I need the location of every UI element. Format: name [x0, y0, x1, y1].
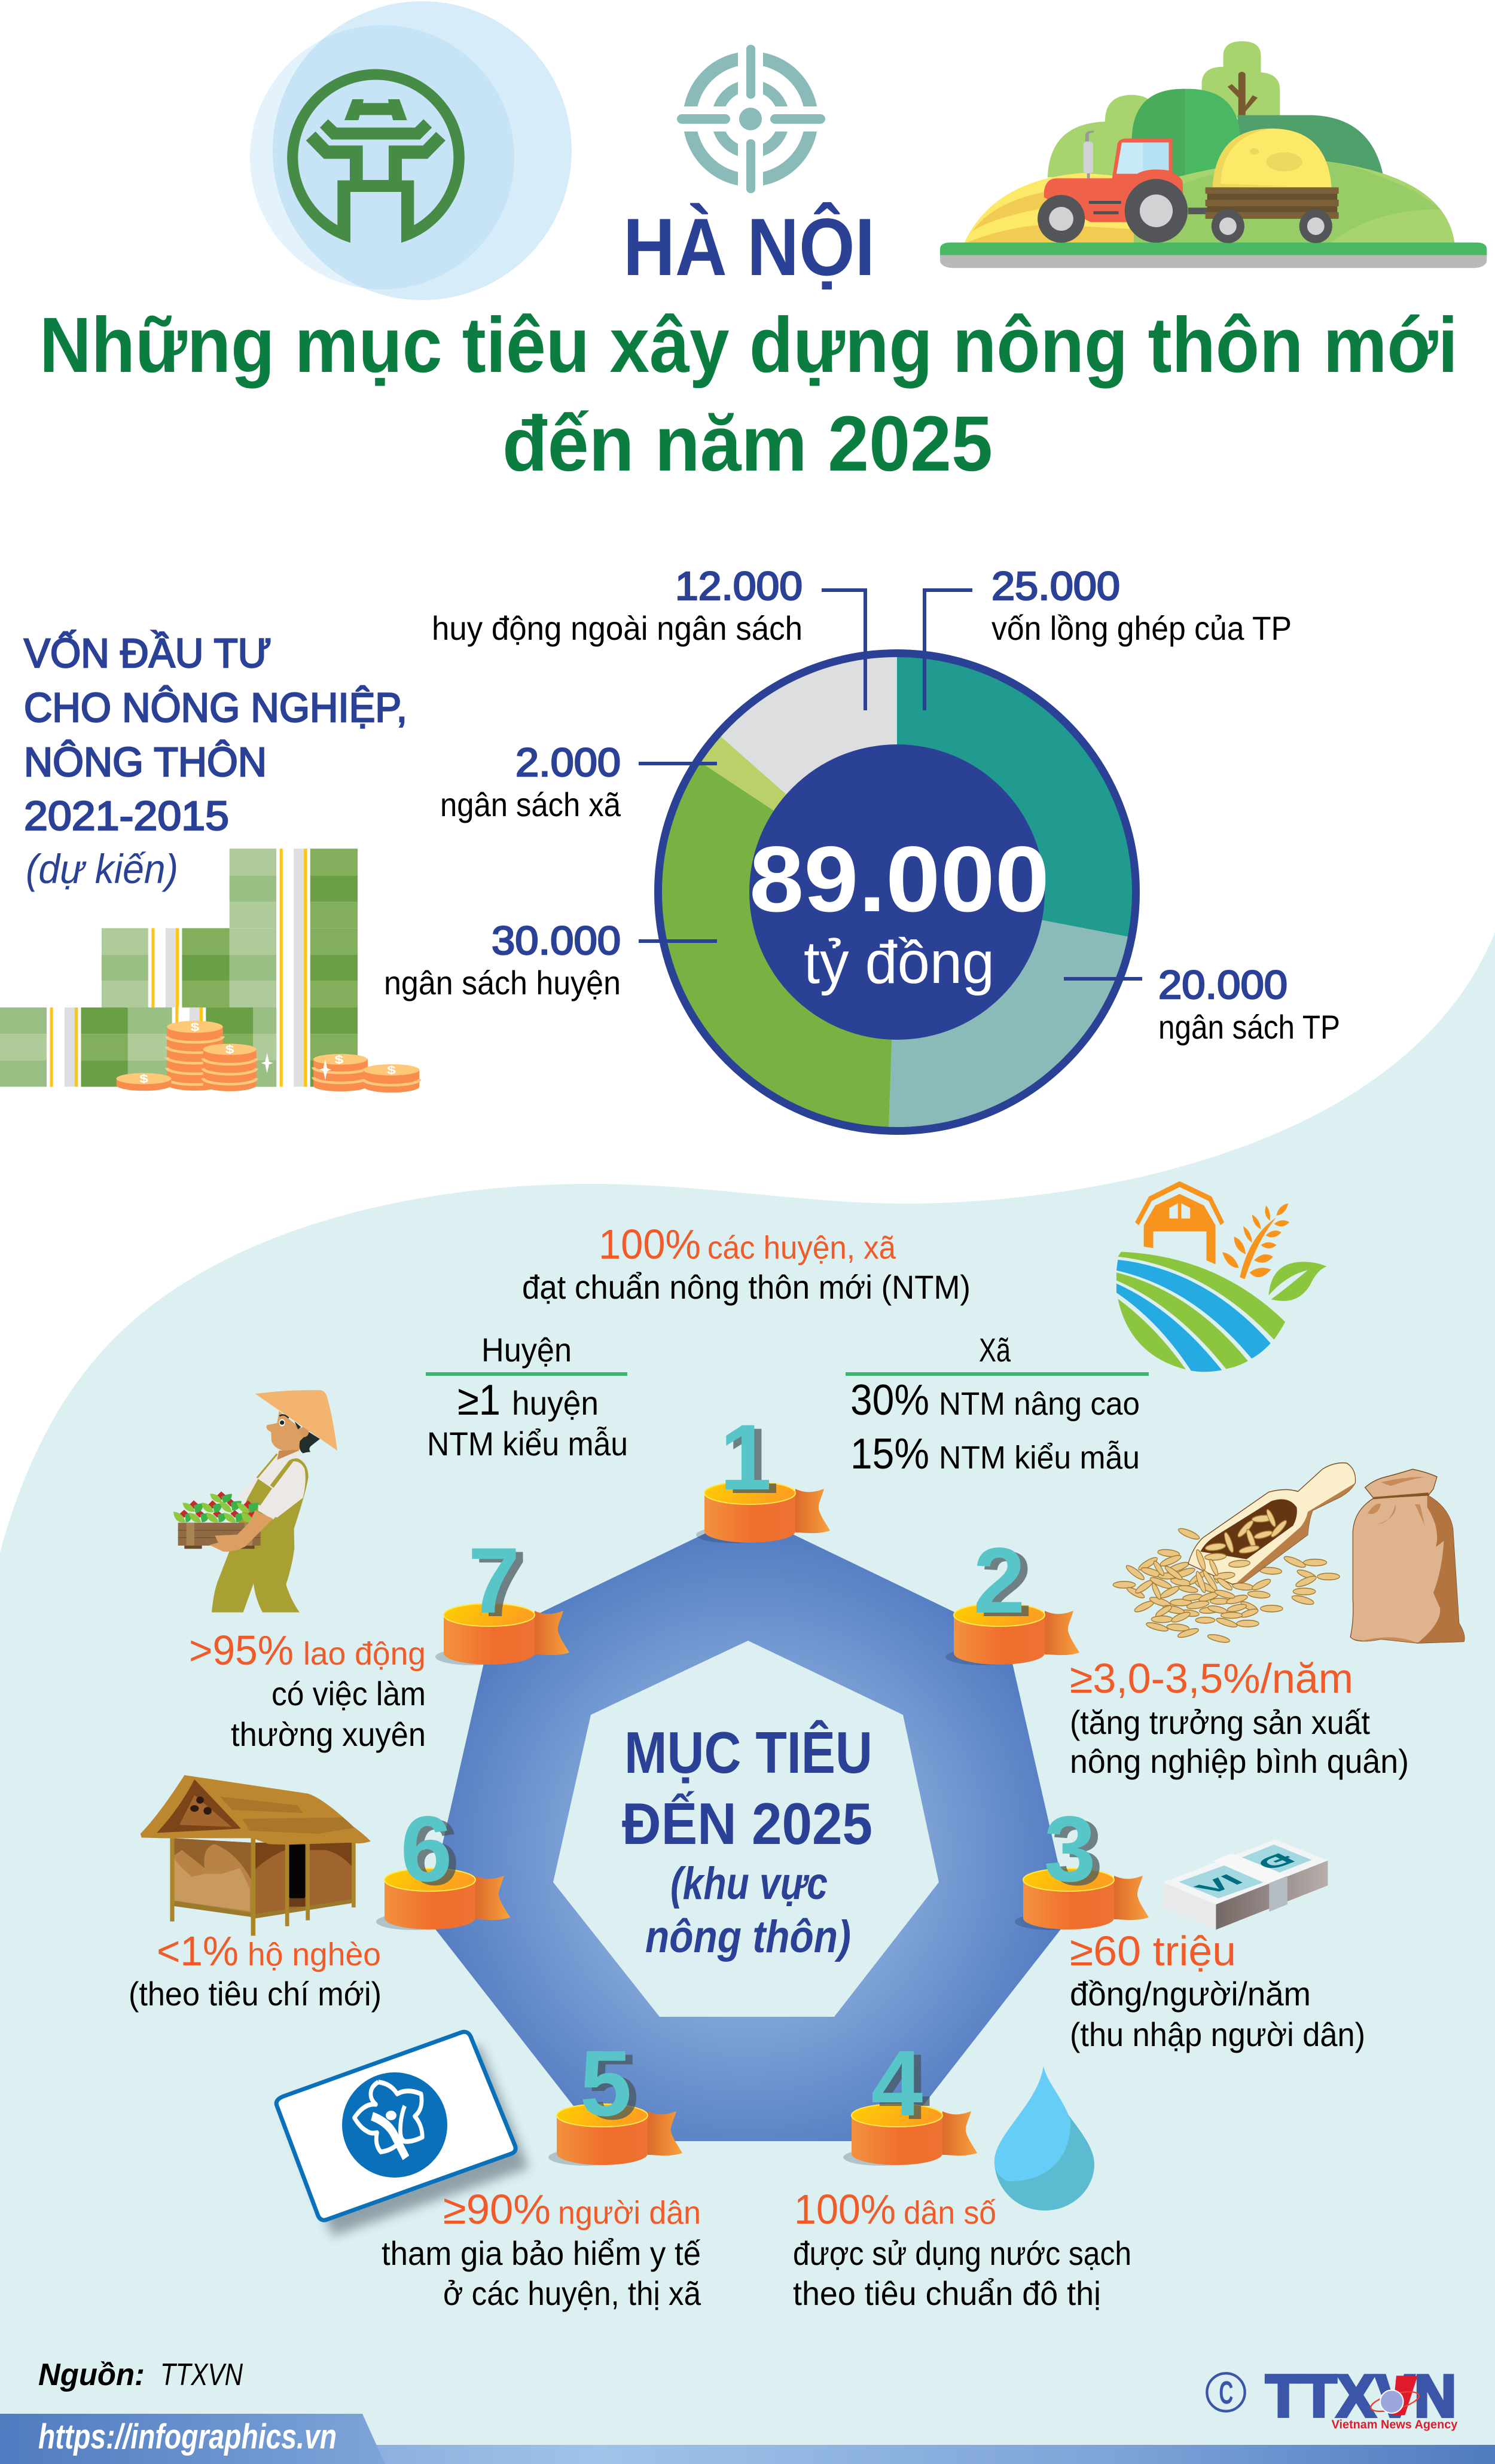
label: 20.000: 20.000 [1158, 963, 1287, 1007]
label: 12.000 [432, 564, 803, 647]
footer url: https://infographics.vn [38, 2417, 337, 2456]
ribbon number 4: 4 [878, 2035, 930, 2139]
heading: Hà Nội: HÀ NỘI [623, 201, 875, 292]
column: district targets: ≥1 [457, 1376, 501, 1424]
text: target 4 clean water: được sử dụng nước sạch [793, 2234, 1131, 2272]
text: target 5 health insurance: ở các huyện, thị xã [443, 2274, 701, 2312]
icon: water drop [994, 2066, 1094, 2210]
text: target 2 agriculture growth: ≥3,0-3,5%/năm [1070, 1655, 1353, 1702]
centre heading: targets to 2025: (khu vực [670, 1858, 828, 1909]
single coin [117, 1072, 171, 1091]
text: target 3 income: ≥60 triệu [1070, 1928, 1236, 1974]
column: commune targets: NTM kiểu mẫu [939, 1440, 1140, 1476]
centre heading: targets to 2025 [622, 1720, 872, 1962]
coin stack short: $ [387, 1064, 396, 1076]
text: 100% districts and communes [522, 1221, 971, 1306]
heading: investment capital: (dự kiến) [26, 846, 178, 892]
column: district targets: NTM kiểu mẫu [427, 1425, 628, 1462]
column: district targets: Huyện [481, 1331, 572, 1369]
text: target 7 employment: có việc làm [271, 1675, 426, 1712]
ribbon number 3: 3 [1051, 1801, 1103, 1905]
coin stack tall [167, 1021, 223, 1091]
text: 100% districts and communes: 100% [599, 1221, 701, 1268]
single coin: $ [139, 1072, 148, 1085]
heading: investment capital [24, 630, 407, 892]
illustration: tractor on farm [940, 41, 1487, 268]
label: 20.000 [1158, 963, 1340, 1046]
donut total: 89.000 [749, 828, 1049, 932]
column: district targets [426, 1331, 628, 1462]
logo: TTXVN: Vietnam News Agency [1332, 2419, 1457, 2432]
centre heading: targets to 2025: ĐẾN 2025 [622, 1791, 872, 1857]
label: 12.000: huy động ngoài ngân sách [432, 609, 803, 647]
coin stack medium: $ [225, 1043, 234, 1056]
logo: TTXVN: TTXVN [1265, 2363, 1456, 2429]
icon: farmer with crate [173, 1390, 337, 1613]
label: 25.000: 25.000 [991, 564, 1120, 609]
coin stack short [364, 1064, 419, 1092]
label: 2.000: ngân sách xã [440, 786, 621, 823]
coin stack small [313, 1053, 368, 1091]
title line 2: đến năm 2025 [502, 399, 993, 487]
icon: money bundle: VI [1188, 1871, 1250, 1898]
donut unit: tỷ đồng [804, 929, 994, 996]
text: target 4 clean water: theo tiêu chuẩn đô thị [793, 2274, 1101, 2312]
crate plants [173, 1491, 262, 1522]
ribbon number 2 [945, 1529, 1079, 1665]
ribbon number 7: 7 [475, 1532, 527, 1636]
text: target 5 health insurance: ≥90% [443, 2186, 551, 2233]
ribbon number 3 [1015, 1797, 1149, 1930]
icon: grain sack [1350, 1469, 1465, 1643]
text: 100% districts and communes: đạt chuẩn nông thôn mới (NTM) [522, 1268, 971, 1306]
copyright mark [1207, 2373, 1245, 2411]
front stack [0, 1007, 276, 1087]
heading: investment capital: VỐN ĐẦU TƯ [24, 630, 271, 676]
text: target 2 agriculture growth: nông nghiệp bình quân) [1070, 1742, 1409, 1780]
text: target 4 clean water [793, 2186, 1131, 2312]
icon: money bundle: Đ [1248, 1849, 1302, 1873]
middle stack [102, 928, 230, 1007]
text: target 2 agriculture growth: (tăng trưởng sản xuất [1070, 1703, 1370, 1741]
label: 2.000: 2.000 [515, 740, 621, 785]
text: target 6 poverty: hộ nghèo [248, 1937, 381, 1973]
column: commune targets: 15% [850, 1430, 929, 1478]
text: target 7 employment: thường xuyên [231, 1715, 426, 1753]
text: target 7 employment [189, 1627, 426, 1753]
coin stack medium [203, 1043, 257, 1091]
ribbon number 4 [843, 2032, 977, 2166]
source: Nguồn: [38, 2358, 145, 2392]
icon: target crosshair [673, 42, 828, 196]
ribbon number 7: 7 [468, 1529, 520, 1633]
text: target 4 clean water: 100% [794, 2186, 896, 2233]
text: target 6 poverty [129, 1928, 382, 2013]
text: target 5 health insurance [382, 2186, 701, 2312]
ribbon number 6 [376, 1797, 510, 1930]
illustration: stacks of banknotes and coins [0, 848, 419, 1092]
text: target 6 poverty: <1% [157, 1928, 239, 1974]
icon: grain scoop [1113, 1463, 1356, 1644]
ribbon number 1 [696, 1406, 830, 1543]
background: light teal curved panel [0, 932, 1495, 2464]
text: target 6 poverty: (theo tiêu chí mới) [129, 1975, 382, 2013]
column: commune targets: Xã [979, 1331, 1011, 1369]
text: target 3 income: đồng/người/năm [1070, 1975, 1311, 2013]
ribbon number 1: 1 [720, 1406, 771, 1510]
icon: farm logo [1116, 1184, 1327, 1372]
text: target 2 agriculture growth [1070, 1655, 1409, 1780]
footer tab [0, 2414, 385, 2464]
label: 2.000 [440, 740, 621, 823]
source: TTXVN [160, 2358, 243, 2392]
text: target 3 income: (thu nhập người dân) [1070, 2016, 1365, 2053]
ribbon number 5: 5 [580, 2032, 631, 2136]
source [38, 2358, 243, 2392]
ribbon number 2: 2 [974, 1529, 1025, 1633]
right stack [230, 848, 358, 1087]
label: 20.000: ngân sách TP [1158, 1008, 1340, 1046]
column: district targets: huyện [512, 1384, 599, 1422]
column: commune targets: 30% [850, 1376, 929, 1424]
text: 100% districts and communes: các huyện, xã [707, 1230, 896, 1266]
icon: money bundle [1163, 1840, 1328, 1929]
ribbon number 6: 6 [408, 1801, 459, 1905]
label: 30.000: ngân sách huyện [384, 964, 621, 1002]
label: 12.000: 12.000 [675, 564, 803, 609]
text: target 4 clean water: dân số [904, 2195, 996, 2231]
icon: health insurance card [276, 2032, 529, 2236]
heading: investment capital: 2021-2015 [24, 793, 229, 839]
label: 25.000 [991, 564, 1292, 647]
copyright mark: C [1219, 2376, 1233, 2411]
logo: Hanoi emblem on blue circles [250, 1, 572, 300]
text: target 7 employment: lao động [303, 1636, 426, 1672]
ribbon number 5 [548, 2032, 682, 2166]
text: target 5 health insurance: người dân [558, 2195, 701, 2231]
label: 30.000 [384, 918, 621, 1002]
ribbon number 3: 3 [1044, 1797, 1096, 1901]
column: commune targets: NTM nâng cao [939, 1386, 1140, 1422]
ribbon number 1: 1 [727, 1409, 779, 1513]
ribbon number 7 [435, 1529, 569, 1665]
title [39, 301, 1458, 487]
heading: investment capital: NÔNG THÔN [24, 739, 267, 785]
centre heading: targets to 2025: nông thôn) [645, 1912, 851, 1962]
ribbon number 4: 4 [871, 2032, 923, 2136]
heptagon frame [426, 1513, 1070, 2141]
text: target 3 income [1070, 1928, 1365, 2053]
ribbon number 6: 6 [401, 1797, 452, 1901]
leader lines [639, 590, 1142, 979]
text: target 7 employment: >95% [189, 1627, 294, 1674]
text: target 5 health insurance: tham gia bảo hiểm y tế [382, 2234, 701, 2272]
coin stack tall: $ [190, 1021, 199, 1033]
centre heading: targets to 2025: MỤC TIÊU [624, 1720, 872, 1785]
heading: investment capital: CHO NÔNG NGHIỆP, [24, 685, 407, 731]
donut chart: investment capital by source [657, 653, 1136, 1131]
label: 25.000: vốn lồng ghép của TP [991, 609, 1292, 647]
ribbon number 2: 2 [981, 1532, 1032, 1636]
ribbon number 5: 5 [587, 2035, 639, 2139]
footer bar [0, 2445, 1495, 2464]
column: commune targets [846, 1331, 1149, 1478]
icon: thatched hut [141, 1775, 371, 1935]
label: 30.000: 30.000 [492, 918, 621, 963]
sparkles [261, 1053, 331, 1080]
coin stack small: $ [334, 1053, 343, 1065]
